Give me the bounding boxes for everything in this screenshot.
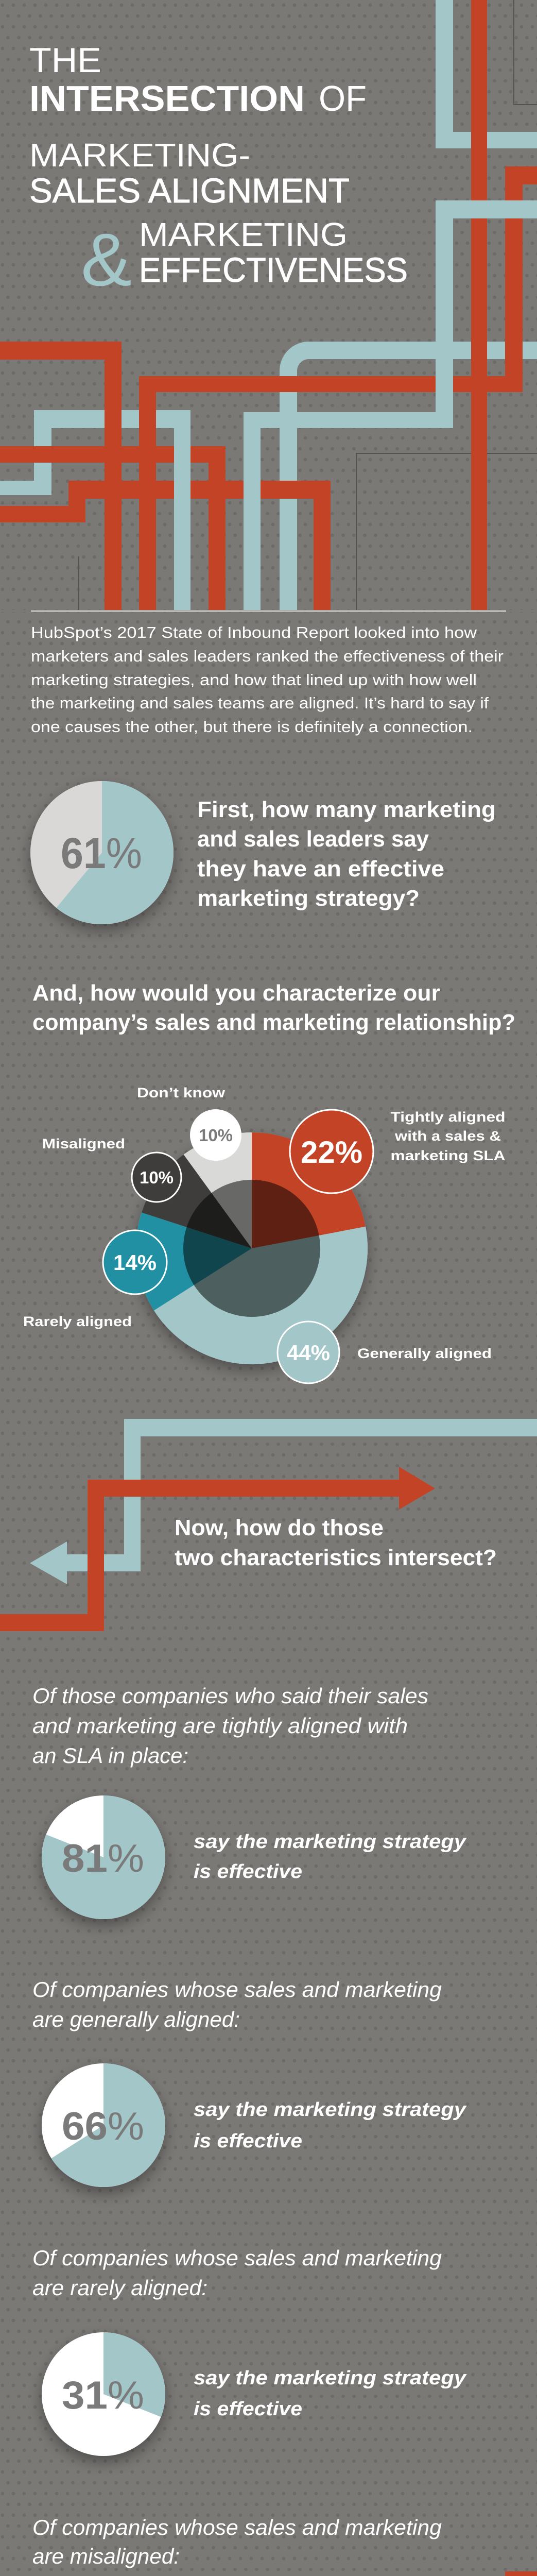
pie: 81% <box>42 1795 165 1919</box>
pie: 81%: 81% <box>62 1837 144 1880</box>
label: generally aligned <box>278 1321 492 1383</box>
section: rarely aligned: are rarely aligned: <box>32 2276 207 2300</box>
title <box>29 41 408 301</box>
label: tightly aligned: marketing SLA <box>390 1148 506 1163</box>
section: tightly aligned: say the marketing strategy <box>194 1831 467 1853</box>
intro text block: marketers and sales leaders ranked the effectiveness of their <box>31 647 504 665</box>
title: & <box>81 218 132 301</box>
pie: 31%: 31% <box>62 2374 144 2417</box>
section: generally aligned: say the marketing strategy <box>194 2099 467 2121</box>
label: don't know: 10% <box>199 1126 233 1145</box>
pie chart: 61% effective: 61% <box>61 829 142 877</box>
question: effective strategy: they have an effective <box>197 856 444 882</box>
heading: how do they intersect <box>175 1515 497 1570</box>
question: relationship heading: And, how would you characterize our <box>32 980 440 1006</box>
intro text block: one causes the other, but there is definitely a connection. <box>31 718 473 736</box>
label: generally aligned: Generally aligned <box>357 1346 492 1361</box>
title: MARKETING- <box>29 137 250 174</box>
label: don't know: Don’t know <box>137 1085 226 1100</box>
heading: how do they intersect: two characteristics intersect? <box>175 1545 497 1570</box>
section: rarely aligned: say the marketing strategy <box>194 2367 467 2389</box>
label: misaligned: 10% <box>140 1168 174 1187</box>
arrows: intersecting pipes <box>0 1419 537 1631</box>
title: MARKETING <box>139 216 348 253</box>
question: relationship heading <box>32 980 515 1035</box>
question: effective strategy: and sales leaders say <box>197 826 429 852</box>
section: misaligned <box>32 2515 467 2576</box>
section: generally aligned: is effective <box>194 2130 302 2152</box>
section: misaligned: Of companies whose sales and marketing <box>32 2515 442 2539</box>
intro text block: the marketing and sales teams are aligned. It’s hard to say if <box>31 694 489 712</box>
title: SALES ALIGNMENT <box>29 172 350 210</box>
section: generally aligned <box>32 1977 467 2187</box>
heading: how do they intersect: Now, how do those <box>175 1515 384 1540</box>
label: don't know <box>137 1085 241 1161</box>
pie: 31% <box>42 2332 165 2456</box>
bottom pipes decoration <box>0 2571 537 2576</box>
section: rarely aligned: Of companies whose sales and marketing <box>32 2246 442 2270</box>
section: rarely aligned <box>32 2246 467 2456</box>
section: tightly aligned: is effective <box>194 1861 302 1883</box>
question: effective strategy: First, how many marketing <box>197 797 496 822</box>
label: generally aligned: 44% <box>287 1341 330 1365</box>
section: generally aligned: are generally aligned: <box>32 2007 240 2031</box>
title: INTERSECTION <box>29 78 305 118</box>
label: tightly aligned: 22% <box>301 1135 362 1170</box>
label: tightly aligned <box>290 1109 506 1193</box>
pie chart: 61% effective <box>30 781 174 924</box>
section: generally aligned: Of companies whose sales and marketing <box>32 1977 442 2002</box>
question: effective strategy <box>197 797 496 911</box>
section: misaligned: are misaligned: <box>32 2544 180 2568</box>
section: tightly aligned <box>32 1684 467 1919</box>
label: rarely aligned <box>23 1230 167 1329</box>
label: misaligned: Misaligned <box>42 1136 125 1151</box>
pie: 66% <box>42 2063 165 2187</box>
title: EFFECTIVENESS <box>139 251 408 290</box>
pie: 66%: 66% <box>62 2105 144 2148</box>
label: rarely aligned: 14% <box>113 1250 157 1275</box>
question: effective strategy: marketing strategy? <box>197 886 420 911</box>
section: tightly aligned: Of those companies who said their sales <box>32 1684 428 1708</box>
section: tightly aligned: an SLA in place: <box>32 1743 188 1768</box>
section: rarely aligned: is effective <box>194 2398 302 2420</box>
donut chart: alignment breakdown <box>23 1085 506 1383</box>
intro text block: marketing strategies, and how that lined up with how well <box>31 671 477 689</box>
section: tightly aligned: and marketing are tightly aligned with <box>32 1714 408 1738</box>
title: THE <box>29 41 101 80</box>
question: relationship heading: company’s sales and marketing relationship? <box>32 1010 515 1035</box>
label: misaligned <box>42 1136 181 1202</box>
header pipes decoration <box>0 0 537 612</box>
label: tightly aligned: Tightly aligned <box>390 1109 506 1125</box>
label: tightly aligned: with a sales & <box>394 1128 501 1144</box>
label: rarely aligned: Rarely aligned <box>23 1314 132 1329</box>
title: OF <box>319 78 367 118</box>
intro text block <box>31 623 504 736</box>
intro text block: HubSpot’s 2017 State of Inbound Report looked into how <box>31 623 477 641</box>
